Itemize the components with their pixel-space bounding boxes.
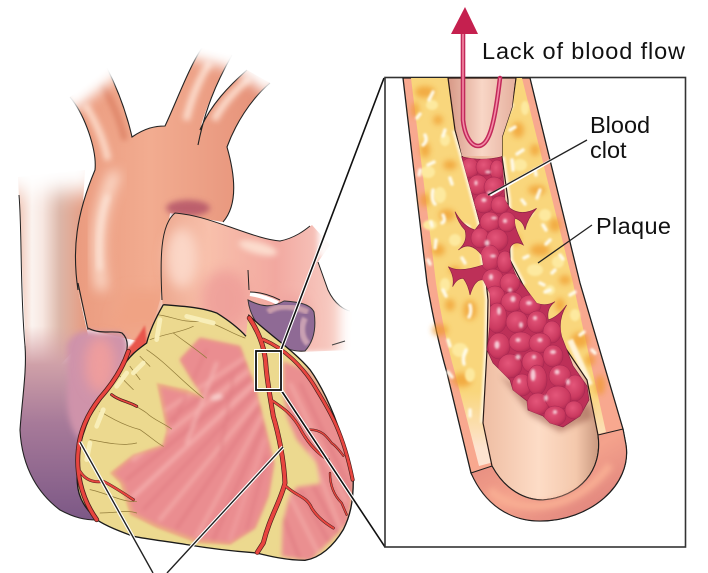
right atrium back chamber [20, 320, 147, 520]
plaque layer [411, 78, 606, 466]
fat folds [90, 315, 245, 513]
zoom box on heart [256, 351, 281, 390]
coronary arteries [78, 318, 353, 552]
artery outer wall [403, 78, 627, 521]
blood clot [448, 157, 592, 432]
heart muscle with fat and coronary arteries [75, 304, 355, 561]
vessel cut ring [471, 429, 627, 521]
zoom leader lines from heart to inset [281, 78, 385, 547]
pulmonary artery [161, 208, 380, 392]
label: blood clot: clot [590, 137, 627, 163]
pointer line to blood clot [490, 140, 587, 195]
pale vein behind the heart [0, 130, 100, 400]
label: blood clot: Blood [590, 112, 650, 138]
label: plaque: Plaque [596, 213, 671, 239]
panel: magnified artery inset [385, 78, 686, 547]
arrow: lack of blood flow [451, 7, 500, 146]
pointer line to blood clot, dark stroke [488, 140, 587, 195]
soft peach edge [110, 338, 274, 545]
heart outline [77, 305, 353, 560]
callout lines pointing at coronary arteries [80, 442, 283, 573]
icon: pulmonary vein appendage [248, 292, 315, 351]
label: lack of blood flow: Lack of blood flow [482, 38, 686, 64]
aorta and branches [43, 15, 292, 343]
zoom box inner stroke [256, 351, 281, 390]
vessel lumen [448, 78, 599, 500]
pointer line to plaque [538, 225, 592, 263]
